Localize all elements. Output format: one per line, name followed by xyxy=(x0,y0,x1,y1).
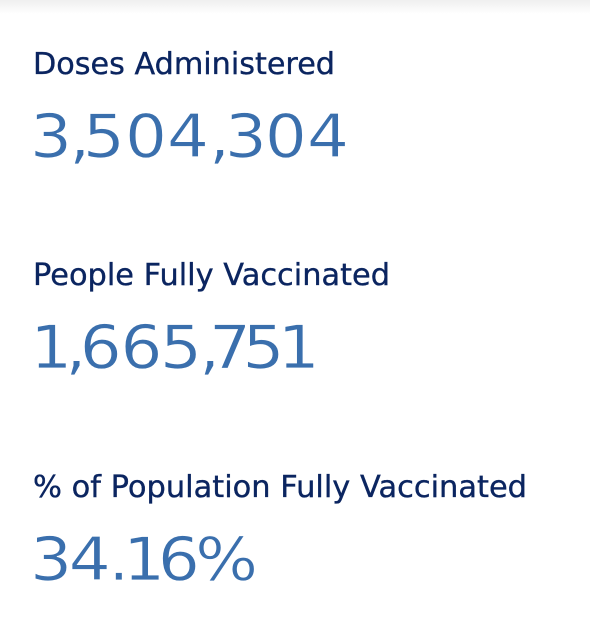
stat: people fully vaccinated xyxy=(30,258,390,382)
value: people fully vaccinated: 1,665,751 xyxy=(30,312,320,382)
stat: doses administered xyxy=(30,47,349,171)
stat: percent of population fully vaccinated xyxy=(30,470,527,594)
label: people fully vaccinated: People Fully Vaccinated xyxy=(33,258,390,293)
value: percent of population fully vaccinated: 34.16% xyxy=(30,524,258,594)
label: percent of population fully vaccinated: % of Population Fully Vaccinated xyxy=(33,470,527,505)
label: doses administered: Doses Administered xyxy=(33,47,335,82)
value: doses administered: 3,504,304 xyxy=(30,101,349,171)
